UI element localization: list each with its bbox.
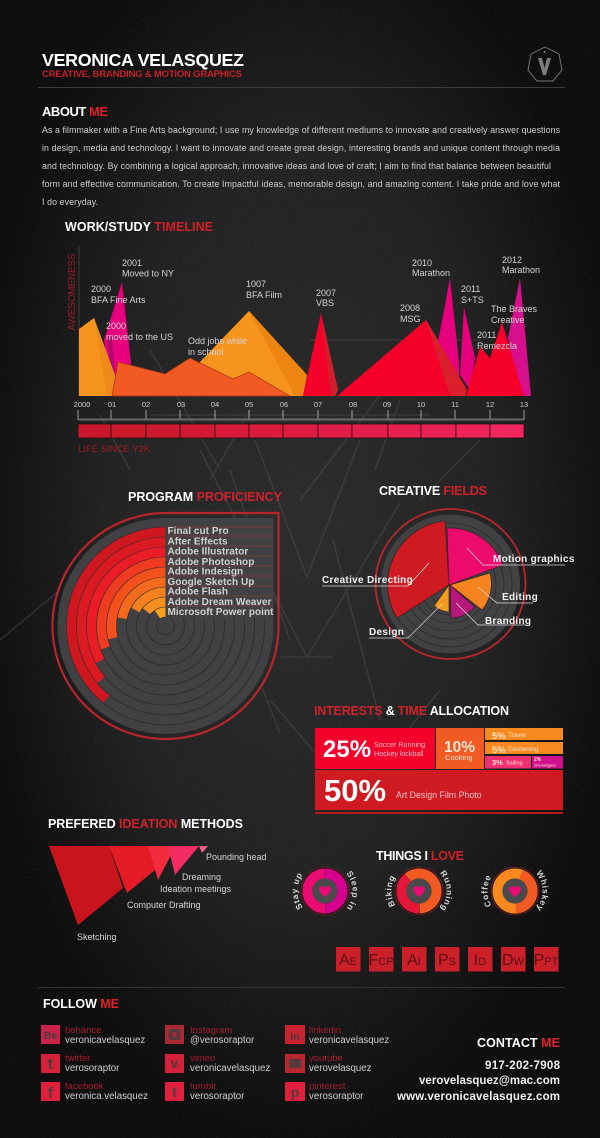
social: pinterest: pinterest — [309, 1081, 346, 1092]
program labels: Microsoft Power point — [168, 607, 274, 618]
50 percent: 50% — [324, 773, 386, 808]
social: instagram: @verosoraptor — [190, 1035, 255, 1046]
panel: things i love — [292, 849, 548, 916]
paragraph: I do everyday. — [42, 197, 98, 207]
event labels: 2000 — [106, 321, 126, 331]
paragraph: in design, media and technology. I want to innovate and create great design, interesting brands and unique content through media — [42, 143, 560, 153]
heading: follow me: FOLLOW ME — [43, 997, 119, 1011]
social: pinterest: p — [291, 1084, 299, 1100]
contact details — [396, 1060, 561, 1103]
event labels: The Braves — [491, 304, 538, 314]
year axis: 07 — [314, 400, 322, 409]
panel: creative fields — [322, 484, 575, 659]
year axis: 09 — [383, 400, 391, 409]
triangles — [49, 846, 208, 925]
subtitle: CREATIVE, BRANDING & MOTION GRAPHICS — [42, 69, 242, 80]
small categories: Shenanigans — [534, 764, 556, 768]
method labels: Sketching — [77, 932, 117, 942]
panel: contact me — [396, 1036, 561, 1103]
social: youtube: verovelasquez — [309, 1063, 372, 1074]
event labels: Odd jobs while — [188, 336, 247, 346]
donut: stay up / sleep in: Sleep in — [347, 871, 358, 910]
event labels: Remezcla — [477, 341, 517, 351]
contact details: www.veronicavelasquez.com — [396, 1091, 560, 1103]
social: pinterest: verosoraptor — [309, 1091, 364, 1102]
event labels: in school — [188, 347, 224, 357]
field labels — [322, 554, 575, 638]
social: vimeo: vimeo — [190, 1053, 215, 1064]
paragraph: form and effective communication. To create Impactful ideas, memorable design, and amazing content. I take pride and love what — [42, 179, 561, 189]
program labels: After Effects — [168, 536, 228, 548]
wedges — [388, 521, 503, 618]
event labels: 2001 — [122, 258, 142, 268]
event labels: MSG — [400, 314, 421, 324]
social: twitter — [41, 1053, 120, 1074]
event labels: 2012 — [502, 255, 522, 265]
contact details: verovelasquez@mac.com — [419, 1075, 560, 1087]
event labels: 2007 — [316, 288, 336, 298]
radial rings — [66, 527, 264, 725]
social: pinterest — [285, 1081, 364, 1102]
software icons — [336, 947, 559, 972]
small categories: 5% — [492, 745, 506, 756]
small categories — [492, 731, 556, 768]
25 percent: Soccer Running — [374, 740, 425, 749]
method labels: Ideation meetings — [160, 884, 232, 894]
field labels: Design — [369, 627, 404, 638]
logo: V heptagon — [528, 47, 562, 81]
event labels: VBS — [316, 298, 334, 308]
software icons: Ai — [407, 952, 421, 969]
event labels: 2010 — [412, 258, 432, 268]
50 percent: Art Design Film Photo — [396, 790, 482, 800]
program labels: Adobe Illustrator — [168, 546, 248, 558]
disc — [376, 509, 526, 659]
event labels: 2000 — [91, 284, 111, 294]
year axis: 13 — [520, 400, 528, 409]
treemap — [315, 728, 563, 814]
event labels: Creative — [491, 315, 525, 325]
social: vimeo: v — [171, 1055, 179, 1071]
software icons: Id — [474, 952, 486, 969]
program labels: Google Sketch Up — [168, 577, 254, 588]
method labels: Dreaming — [182, 872, 221, 882]
social: instagram — [165, 1025, 255, 1046]
donut: stay up / sleep in — [292, 866, 358, 916]
software icons: Dw — [502, 952, 525, 969]
year axis: 11 — [451, 400, 459, 409]
field labels: Branding — [485, 616, 531, 627]
social: youtube: youtube — [309, 1053, 343, 1064]
method labels — [77, 852, 267, 942]
year axis: 08 — [349, 400, 357, 409]
10 percent: Cooking — [445, 753, 473, 762]
event labels: Marathon — [412, 268, 450, 278]
10 percent: 10% — [444, 739, 475, 756]
axis label: AWESOMENESS — [67, 253, 78, 330]
donut: biking / running: Biking — [385, 876, 396, 908]
year axis: 2000 — [74, 400, 90, 409]
leader lines — [322, 548, 565, 638]
heading: about me: ABOUT ME — [42, 104, 108, 119]
heading: creative fields: CREATIVE FIELDS — [379, 484, 487, 498]
social: tumblr: t — [172, 1084, 177, 1101]
software icons: Ae — [339, 952, 357, 969]
25 percent — [323, 736, 425, 763]
program labels: Adobe Photoshop — [168, 557, 254, 568]
social: instagram: Instagram — [190, 1025, 232, 1036]
year axis: 05 — [245, 400, 253, 409]
event labels: 2011 — [477, 330, 496, 340]
donut: biking / running: Running — [440, 870, 452, 911]
donut: coffee / whiskey: Whiskey — [536, 870, 548, 912]
year axis: 02 — [142, 400, 150, 409]
paragraph: and technology. By combining a logical approach, innovative ideas and love of craft; I aim to find that balance between beautiful — [42, 161, 551, 171]
life caption: LIFE SINCE Y2K — [78, 444, 151, 455]
field labels: Creative Directing — [322, 575, 413, 586]
event labels: BFA Fine Arts — [91, 295, 146, 305]
event labels: BFA Film — [246, 290, 282, 300]
program labels: Final cut Pro — [168, 526, 229, 537]
social: twitter: verosoraptor — [65, 1063, 120, 1074]
small categories: 5% — [492, 731, 506, 742]
social: twitter: twitter — [65, 1053, 90, 1064]
year axis: 12 — [486, 400, 494, 409]
donut: coffee / whiskey: Coffee — [481, 876, 491, 907]
panel: interests and time allocation — [314, 704, 563, 814]
about me — [42, 104, 561, 207]
social: tumblr: verosoraptor — [190, 1091, 245, 1102]
panel: timeline — [65, 220, 540, 455]
year axis: 04 — [211, 400, 219, 409]
software icons: Ppt — [534, 952, 559, 969]
program labels: Adobe Dream Weaver — [168, 597, 272, 608]
radial bars — [33, 494, 298, 758]
donut: stay up / sleep in: Stay up — [292, 874, 302, 910]
event labels: 1007 — [246, 279, 266, 289]
label panel — [166, 518, 274, 618]
social: twitter: t — [48, 1056, 54, 1073]
method labels: Computer Drafting — [127, 900, 201, 910]
panel: program proficiency — [33, 490, 298, 758]
software icons: Ps — [438, 952, 456, 969]
field labels: Editing — [502, 592, 538, 603]
social: tumblr — [165, 1081, 245, 1102]
small categories: Gardening — [508, 746, 539, 753]
social: behance: Be — [43, 1030, 58, 1042]
program labels: Adobe Flash — [168, 586, 228, 598]
social: youtube — [285, 1053, 372, 1074]
area chart — [79, 278, 531, 396]
header — [42, 47, 562, 81]
method labels: Pounding head — [206, 852, 267, 862]
donut: biking / running — [385, 866, 452, 916]
event labels — [91, 255, 540, 357]
small categories: 2% — [534, 757, 542, 763]
social: behance — [41, 1025, 145, 1046]
small categories: Sailing — [506, 760, 523, 766]
social: vimeo — [165, 1053, 270, 1074]
event labels: Moved to NY — [122, 268, 174, 278]
year axis: 06 — [280, 400, 288, 409]
25 percent: 25% — [323, 736, 371, 763]
heading: timeline: WORK/STUDY TIMELINE — [65, 220, 213, 234]
title: VERONICA VELASQUEZ — [42, 50, 244, 70]
program labels: Adobe Indesign — [168, 566, 243, 578]
small categories: Travel — [508, 732, 526, 739]
social: facebook: f — [48, 1085, 54, 1102]
heading: things i love: THINGS I LOVE — [376, 849, 464, 863]
social: behance: behance — [65, 1025, 101, 1036]
social: linkedin: in — [290, 1031, 300, 1043]
year axis: 03 — [177, 400, 185, 409]
social: linkedin: linkedin — [309, 1025, 341, 1036]
paragraph — [42, 125, 561, 207]
50 percent — [324, 773, 482, 808]
social: facebook: facebook — [65, 1081, 104, 1092]
program labels — [168, 526, 274, 618]
small categories: 3% — [492, 758, 503, 767]
social: linkedin: veronicavelasquez — [309, 1035, 389, 1046]
contact details: 917-202-7908 — [485, 1060, 561, 1072]
heading: ideation: PREFERED IDEATION METHODS — [48, 817, 243, 831]
event labels: 2008 — [400, 303, 420, 313]
event labels: moved to the US — [106, 332, 173, 342]
heading: program proficiency: PROGRAM PROFICIENCY — [128, 490, 283, 504]
radial frame — [52, 513, 278, 739]
paragraph: As a filmmaker with a Fine Arts background; I use my knowledge of different mediums to innovate and creatively answer questions — [42, 125, 561, 135]
social: linkedin — [285, 1025, 389, 1046]
field labels: Motion graphics — [493, 554, 575, 565]
social: vimeo: veronicavelasquez — [190, 1063, 270, 1074]
donut: coffee / whiskey — [481, 866, 548, 916]
panel: ideation methods — [48, 817, 267, 942]
event labels: Marathon — [502, 265, 540, 275]
year axis: 10 — [417, 400, 425, 409]
life bar — [78, 424, 524, 438]
social: behance: veronicavelasquez — [65, 1035, 145, 1046]
event labels: 2011 — [461, 284, 480, 294]
year axis — [74, 400, 528, 420]
year axis: 01 — [108, 400, 116, 409]
event labels: S+TS — [461, 295, 484, 305]
panel: follow me — [41, 997, 389, 1102]
software icons: Fcp — [368, 952, 394, 969]
social: facebook: veronica.velasquez — [65, 1091, 148, 1102]
social: facebook — [41, 1081, 148, 1102]
social: tumblr: tumblr — [190, 1081, 216, 1092]
heading: contact me: CONTACT ME — [477, 1036, 560, 1050]
25 percent: Hockey kickball — [374, 749, 424, 758]
heading: interests: INTERESTS & TIME ALLOCATION — [314, 704, 509, 718]
